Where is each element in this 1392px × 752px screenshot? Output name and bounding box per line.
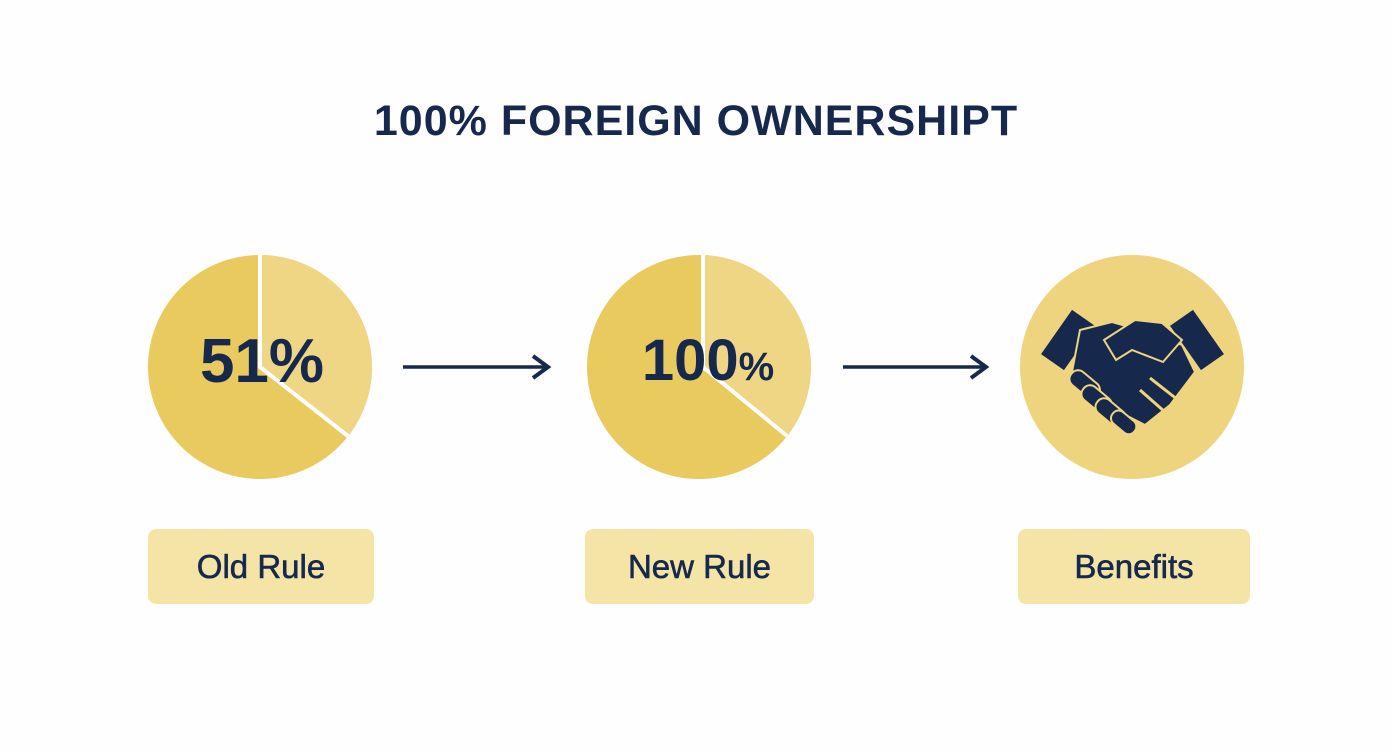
arrow 2: [843, 356, 986, 378]
pie: old rule 51%: [148, 255, 372, 479]
label: benefits: Benefits: [1074, 548, 1194, 584]
label: new rule: [585, 529, 814, 604]
label: old rule: Old Rule: [197, 548, 325, 584]
label: new rule: New Rule: [628, 548, 771, 584]
label: old rule: [148, 529, 374, 604]
title: 100% FOREIGN OWNERSHIPT: [374, 97, 1018, 145]
icon: handshake: [1020, 255, 1244, 479]
pie: new rule 100%: [587, 255, 811, 479]
arrow 1: [403, 356, 548, 378]
label: benefits: [1018, 529, 1250, 604]
pie: new rule 100%: 100%: [642, 328, 774, 393]
pie: old rule 51%: 51%: [200, 327, 324, 396]
